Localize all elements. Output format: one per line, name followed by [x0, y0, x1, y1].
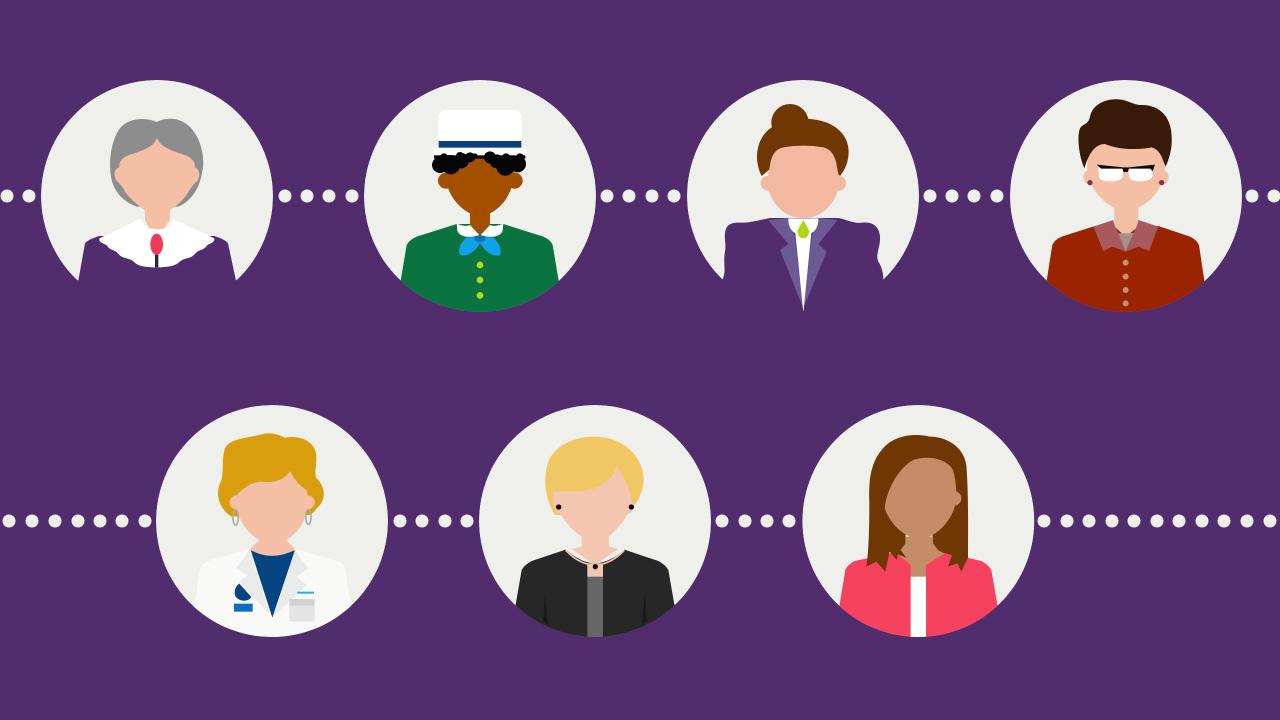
portrait: woman in white hat and green dress — [364, 80, 596, 323]
bottom row dotted line — [2, 514, 1276, 528]
top row dotted line — [0, 190, 1280, 202]
portrait: blonde doctor in white lab coat — [156, 405, 388, 648]
portrait: brown-haired woman in coral jacket — [802, 405, 1034, 650]
portrait: woman with bun in purple suit — [687, 80, 919, 323]
portrait: blonde short-haired woman in black jacket — [479, 405, 711, 650]
curly black hair — [432, 151, 526, 176]
portrait: woman with dark short hair and glasses in red blouse — [1010, 80, 1242, 323]
portrait: grey-haired woman with lace collar — [41, 80, 273, 280]
portrait timeline infographic — [0, 80, 1280, 637]
